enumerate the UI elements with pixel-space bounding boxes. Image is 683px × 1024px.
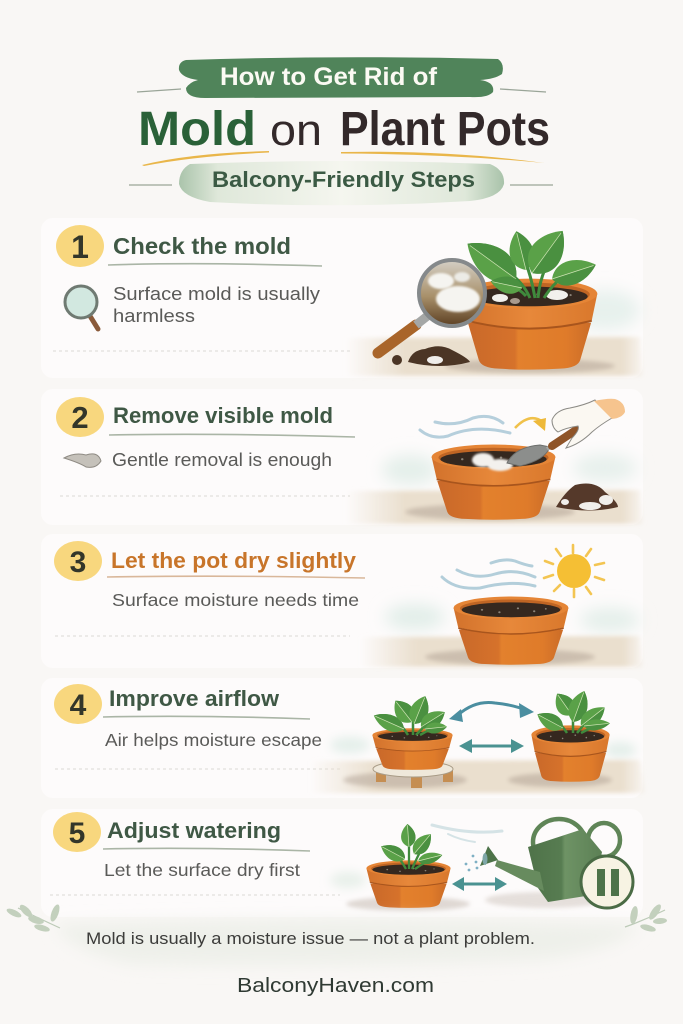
arrow: double headed xyxy=(459,739,524,753)
text: surface mold: harmless xyxy=(113,306,195,326)
panel: step 1 check the mold xyxy=(41,218,643,378)
footer block xyxy=(5,903,667,997)
wind lines xyxy=(420,416,510,437)
mold being scooped xyxy=(472,453,513,471)
text: surface mold: Surface mold is usually xyxy=(113,284,320,304)
number badge 5 xyxy=(53,812,101,852)
faint wind lines xyxy=(432,825,502,842)
arrow: curved airflow xyxy=(449,702,534,722)
subtitle pill: Balcony-Friendly Steps xyxy=(212,167,475,192)
heading: remove visible mold: Remove visible mold xyxy=(113,403,333,428)
main title: Mold xyxy=(138,103,256,156)
left leaf sprig xyxy=(5,903,61,933)
text: surface moisture: Surface moisture needs time xyxy=(112,590,359,610)
icon: sun xyxy=(544,545,604,597)
number badge 2: 2 xyxy=(71,400,89,435)
illustration: removing mold with trowel xyxy=(345,399,643,524)
heading: let the pot dry: Let the pot dry slightly xyxy=(111,548,357,573)
text: surface mold xyxy=(113,284,320,326)
removed mold pile xyxy=(556,484,618,510)
website: BalconyHaven.com xyxy=(237,974,434,997)
magnifying glass xyxy=(378,260,485,353)
plant xyxy=(458,222,599,298)
arrow: double headed xyxy=(452,877,507,891)
right leaf sprig xyxy=(625,903,667,933)
illustration: drying pot under sun xyxy=(360,545,643,667)
illustration: pot with magnifier xyxy=(345,222,643,376)
number badge 3 xyxy=(54,541,102,581)
left plant xyxy=(371,693,449,736)
title block xyxy=(129,57,553,205)
footer message: Mold is usually a moisture issue — not a plant problem. xyxy=(86,929,535,948)
right plant xyxy=(534,688,610,735)
heading: check the mold: Check the mold xyxy=(113,233,291,259)
main title xyxy=(138,103,550,166)
icon: spoon xyxy=(64,454,101,467)
number badge 3: 3 xyxy=(70,546,86,579)
panel: step 3 let the pot dry xyxy=(41,534,643,668)
number badge 5: 5 xyxy=(69,817,85,850)
number badge 1 xyxy=(56,225,104,267)
mold on soil xyxy=(492,290,568,304)
soil pile xyxy=(392,346,470,366)
heading: improve airflow: Improve airflow xyxy=(109,686,280,711)
text: gentle removal: Gentle removal is enough xyxy=(112,450,332,470)
hand with trowel xyxy=(507,399,625,466)
plant xyxy=(378,824,444,869)
heading: adjust watering: Adjust watering xyxy=(107,818,281,843)
panel: step 5 adjust watering xyxy=(41,809,643,917)
wind lines xyxy=(442,560,535,588)
yellow arrow xyxy=(515,418,546,431)
pause badge xyxy=(581,856,633,908)
illustration: pot and watering can xyxy=(330,819,633,911)
text: air helps: Air helps moisture escape xyxy=(105,730,322,750)
panel: step 2 remove visible mold xyxy=(41,389,643,525)
main title: Plant Pots xyxy=(340,103,550,156)
icon: magnifying glass xyxy=(65,286,98,329)
number badge 2 xyxy=(56,397,104,437)
watering can xyxy=(480,819,620,902)
title banner xyxy=(137,57,546,98)
panel: step 4 improve airflow xyxy=(41,678,645,798)
number badge 1: 1 xyxy=(71,229,89,265)
number badge 4 xyxy=(54,684,102,724)
illustration: two pots with airflow xyxy=(310,688,645,793)
footer brush wash xyxy=(55,920,640,965)
text: let surface dry: Let the surface dry first xyxy=(104,860,300,880)
wooden plant stand xyxy=(373,761,453,788)
subtitle pill xyxy=(129,161,553,205)
number badge 4: 4 xyxy=(70,689,87,722)
main title: on xyxy=(270,106,322,155)
title banner: How to Get Rid of xyxy=(220,63,438,91)
water drops xyxy=(465,855,478,871)
